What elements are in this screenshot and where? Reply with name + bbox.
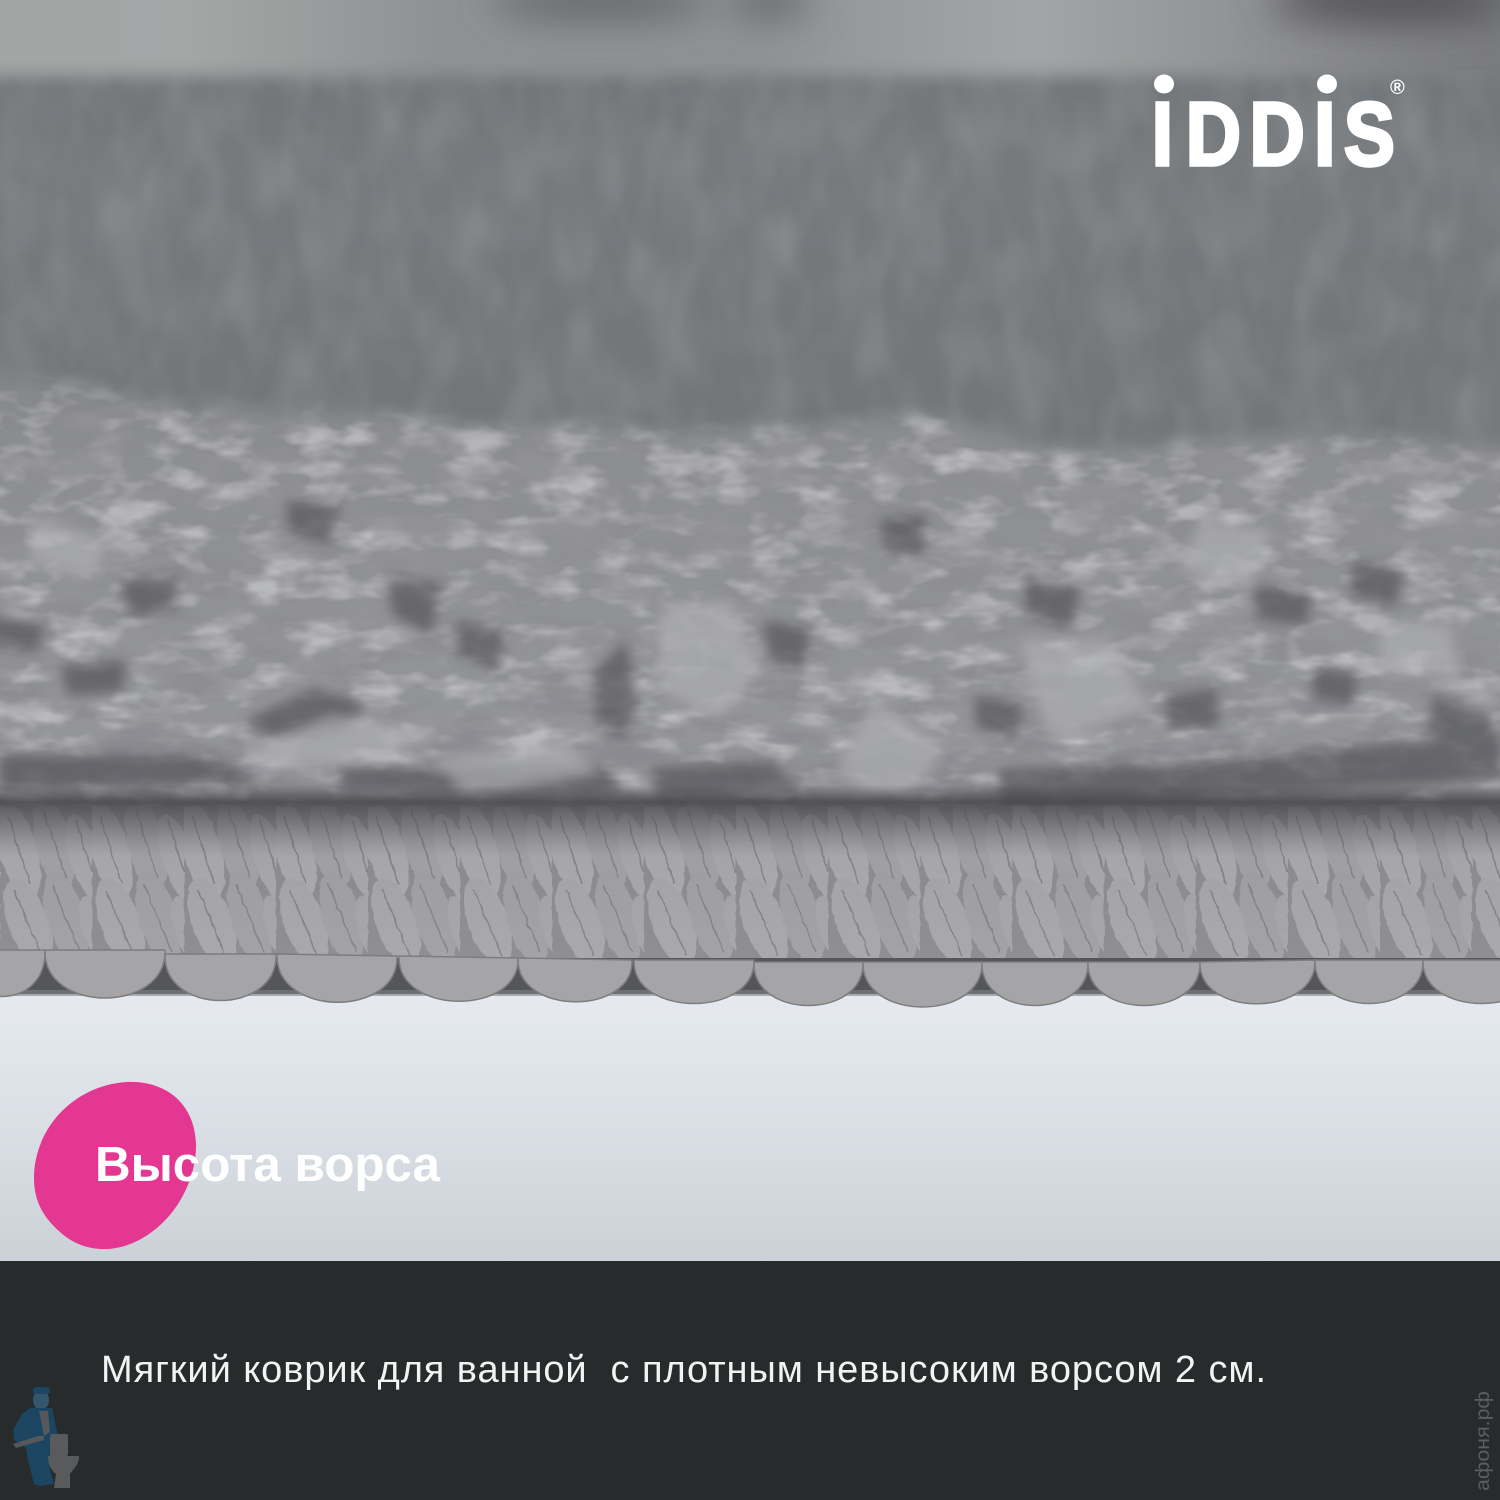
site watermark: афоня.рф	[1473, 1391, 1494, 1491]
light tuft highlights	[30, 520, 1460, 800]
fluffy pile	[0, 376, 1500, 808]
toilet	[48, 1434, 79, 1488]
dark gaps between tufts	[0, 500, 1500, 810]
blurred far edge of the mat	[0, 0, 1500, 76]
pink blob accent	[34, 1082, 196, 1249]
plumber figure	[13, 1387, 58, 1486]
floor under the mat	[0, 992, 1500, 1262]
scalloped stitched edge	[0, 950, 1500, 1007]
icon: plumber with toilet watermark	[13, 1387, 79, 1488]
logo dots	[1154, 74, 1337, 94]
caption text: Мягкий коврик для ванной с плотным невысоким ворсом 2 см.	[101, 1349, 1266, 1391]
twisted rope edging	[0, 785, 1500, 971]
heading: Высота ворса	[95, 1138, 441, 1192]
registered mark: ®	[1390, 77, 1405, 99]
logo wordmark: IDDIS	[1152, 83, 1395, 184]
soft carpet surface in the background	[0, 0, 1500, 480]
dark caption panel	[0, 1261, 1500, 1500]
brand logo	[1152, 74, 1405, 184]
wrench	[13, 1436, 44, 1448]
